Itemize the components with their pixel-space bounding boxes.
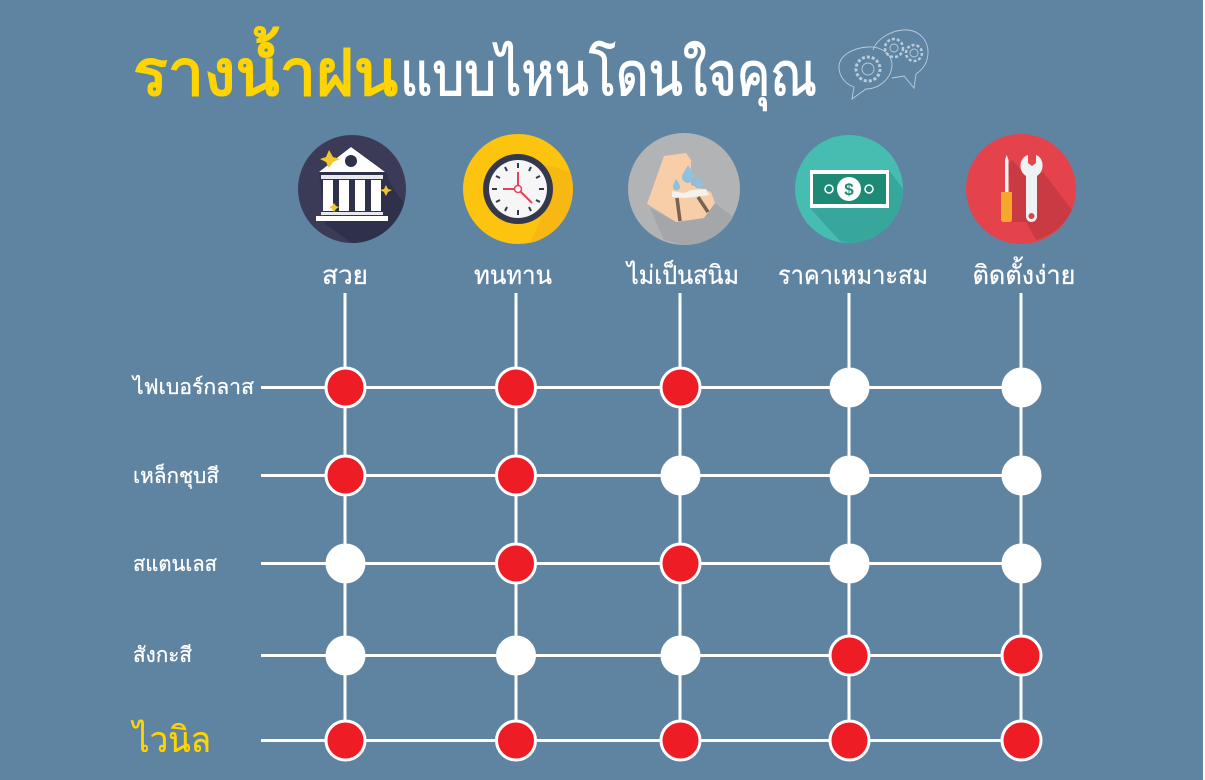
icon: waterproof hand bbox=[628, 133, 740, 245]
column headers: สวย bbox=[322, 260, 368, 290]
icon: screwdriver and wrench bbox=[966, 134, 1076, 244]
column headers: ราคาเหมาะสม bbox=[778, 260, 928, 290]
icon: banknote bbox=[795, 135, 903, 243]
row: coated steel bbox=[326, 456, 1040, 495]
title bbox=[133, 26, 817, 111]
icon: banknote: $ bbox=[844, 180, 854, 199]
row: galvanized bbox=[327, 636, 1041, 675]
icon: speech bubbles with gears bbox=[839, 30, 928, 99]
row labels: เหล็กชุบสี bbox=[133, 462, 219, 489]
column headers: ไม่เป็นสนิม bbox=[625, 259, 739, 290]
column headers: ทนทาน bbox=[474, 260, 552, 290]
column headers: ติดตั้งง่าย bbox=[972, 256, 1076, 290]
row: stainless bbox=[327, 544, 1040, 583]
grid lines bbox=[261, 293, 1021, 740]
row labels: ไฟเบอร์กลาส bbox=[131, 375, 254, 399]
row: fiberglass bbox=[326, 368, 1040, 407]
row: vinyl bbox=[326, 721, 1041, 760]
row labels: สังกะสี bbox=[133, 644, 192, 667]
column headers bbox=[322, 256, 1076, 290]
row labels: ไวนิล bbox=[130, 719, 211, 760]
row labels: สแตนเลส bbox=[133, 553, 217, 576]
row labels bbox=[130, 375, 254, 760]
matrix dots bbox=[326, 368, 1041, 760]
icon: classical building bbox=[298, 135, 406, 243]
title: รางน้ำฝน bbox=[133, 26, 398, 109]
title: แบบไหนโดนใจคุณ bbox=[400, 40, 817, 111]
icon: clock bbox=[463, 134, 573, 244]
